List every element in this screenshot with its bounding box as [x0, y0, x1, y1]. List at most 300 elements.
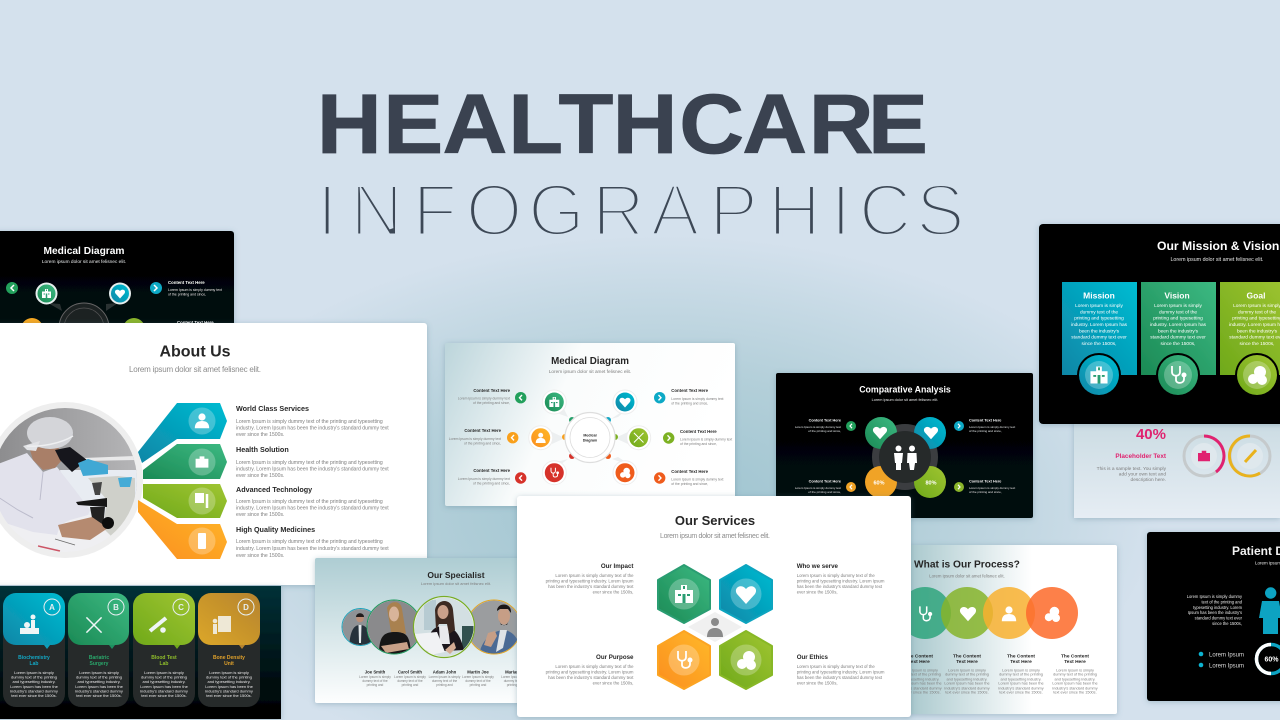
text: world class services: Lorem Ipsum is simply dummy text of the printing and typesetting [236, 419, 383, 425]
text: our purpose: Our Purpose [596, 654, 634, 661]
card: mission: printing and typesetting [1074, 316, 1124, 322]
step 1 text: and typesetting industry. [899, 677, 939, 681]
card A: Lab [30, 661, 38, 667]
centre diamond with doctor icon [688, 612, 742, 642]
step 2 text [944, 654, 990, 695]
panel: about us [0, 323, 427, 585]
card: mission: Mission [1083, 290, 1115, 300]
team names: printing and [436, 683, 453, 687]
description [1187, 594, 1243, 626]
content labels: of the printing and since, [473, 401, 510, 405]
step 2 text: Lorem Ipsum is simply [948, 668, 986, 672]
card A: industry's standard dummy [10, 688, 58, 694]
portrait 4 [471, 600, 517, 654]
subheading: Lorem ipsum dolor sit amet felisnec elit. [929, 574, 1005, 578]
text: high quality medicines: ever since the 1500s. [236, 553, 284, 559]
hexagon: heart [720, 565, 772, 623]
step 4 text: and typesetting industry. [1055, 677, 1095, 681]
step 4 text: dummy text of the printing [1053, 673, 1097, 677]
node: person [529, 426, 553, 450]
panel: comparative analysis [776, 373, 1033, 518]
subheading: Lorem ipsum dolor sit amet felisnec elit. [129, 365, 261, 374]
hub [565, 412, 615, 462]
node: surgery [627, 426, 651, 450]
card: vision: been the industry's [1158, 328, 1199, 334]
circle: yellow [983, 587, 1035, 639]
arrow: world class services [138, 403, 227, 463]
labels: Content Text Here [809, 418, 841, 422]
description: add your own text and [1119, 472, 1166, 478]
step 4 text: The Content [1061, 654, 1089, 660]
card C: C [178, 603, 184, 612]
card C: Lorem Ipsum is simply [144, 670, 184, 675]
text: our impact [546, 563, 634, 595]
donut: pink [1184, 436, 1224, 476]
legend [1199, 652, 1244, 670]
text: who we serve: Lorem Ipsum is simply dummy text of the [797, 573, 875, 578]
card B: B [113, 603, 119, 612]
card A [3, 593, 65, 707]
text: who we serve [797, 563, 885, 595]
team names: Lorem Ipsum is simply [394, 675, 426, 679]
text: our purpose: has been the industry's standard dummy text [548, 675, 634, 680]
team names: printing and [470, 683, 487, 687]
card D: text ever since the 1500s. [206, 693, 252, 698]
content labels: Lorem Ipsum is simply dummy text [680, 438, 732, 442]
card: vision: dummy text of the [1159, 309, 1197, 315]
donut: 60 percent: 60% [1264, 656, 1279, 664]
portrait 2 [366, 600, 417, 654]
text: world class services [236, 404, 389, 438]
outer ring [872, 424, 938, 490]
subheading: Lorem ipsum dolor sit amet felisnec elit. [421, 581, 491, 586]
card A: text ever since the 1500s. [11, 693, 57, 698]
content labels: Lorem Ipsum is simply dummy text [458, 477, 510, 481]
background glow [160, 235, 1160, 720]
text: advanced technology [236, 485, 389, 518]
circle: 80 percent: 80% [925, 480, 937, 486]
step 2 text: industry's standard dummy [944, 686, 990, 690]
donut: 60 percent [1256, 644, 1280, 674]
heading: Our Specialist [427, 570, 485, 580]
card: goal: since the 1500s, [1240, 341, 1274, 347]
subheading: Lorem ipsum dolor sit amet felisnec elit. [1170, 257, 1264, 263]
step 2 text: dummy text of the printing [945, 673, 989, 677]
hexagon: hospital [658, 565, 710, 623]
content labels: Lorem Ipsum is simply dummy text [449, 437, 501, 441]
card B [68, 593, 129, 707]
content labels: of the printing and since, [680, 442, 717, 446]
heading: About Us [159, 344, 231, 361]
step 1 text: Lorem Ipsum has been the [896, 682, 942, 686]
panel: placeholder donuts [1074, 400, 1280, 518]
description: since the 1500s, [1212, 621, 1242, 626]
team names: Lorem Ipsum is [501, 675, 523, 679]
labels: Content Text Here [969, 418, 1001, 422]
arrows [507, 392, 674, 484]
panel: process [896, 545, 1117, 714]
circle: 80 percent [914, 466, 946, 498]
card: vision: Vision [1164, 290, 1190, 300]
step 1 text [896, 654, 942, 695]
card: mission [1062, 282, 1137, 397]
labels: of the printing and since, [808, 490, 841, 494]
content text: Content Text Here [168, 280, 205, 285]
team names: printing [507, 683, 517, 687]
team names: printing and [402, 683, 419, 687]
card: goal: Goal [1247, 290, 1265, 300]
labels: Lorem Ipsum is simply dummy text [969, 486, 1015, 490]
text: who we serve: has been the industry's standard dummy text [797, 584, 883, 589]
arrow left [6, 282, 18, 294]
card B: Bariatric [89, 655, 109, 661]
text: our impact: Lorem Ipsum is simply dummy text of the [555, 573, 634, 578]
text: advanced technology: Advanced Technology [236, 485, 312, 494]
hub: Medical [583, 434, 597, 438]
hub dots [562, 417, 618, 459]
text: our impact: has been the industry's standard dummy text [548, 584, 634, 589]
title: healthcare: HEALTHCARE [317, 78, 928, 171]
team names: Marian [505, 670, 519, 674]
step 3 text: Lorem Ipsum has been the [998, 682, 1044, 686]
text: advanced technology: Lorem Ipsum is simply dummy text of the printing and typesetting [236, 499, 383, 505]
subtitle: infographics: INFOGRAPHICS [317, 170, 965, 251]
text: world class services: ever since the 1500s. [236, 432, 284, 438]
labels: of the printing and since, [969, 490, 1002, 494]
text: health solution: ever since the 1500s. [236, 473, 284, 479]
hexagon: pills [720, 631, 772, 689]
text: our impact: Our Impact [601, 563, 634, 570]
card C: Lorem Ipsum has been the [140, 684, 189, 689]
content text: Lorem Ipsum is simply dummy text [168, 288, 222, 292]
step 3 text: Lorem Ipsum is simply [1002, 668, 1040, 672]
content text lower: Content Text Here [177, 320, 214, 325]
content labels: Content Text Here [473, 468, 511, 473]
step 4 text: industry's standard dummy [1052, 686, 1098, 690]
content labels [449, 388, 732, 486]
card: goal: dummy text of the [1238, 309, 1276, 315]
node: hospital [36, 282, 58, 304]
content text: of the printing and since, [168, 292, 206, 296]
subheading: Lorem ipsum dolor sit amet felisnec elit. [42, 259, 126, 265]
panel: mission and vision [1039, 224, 1280, 424]
card C: dummy text of the printing [141, 675, 187, 680]
text: world class services: World Class Services [236, 404, 309, 413]
subheading: Lorem ipsum dolor sit amet felisnec elit. [872, 398, 938, 402]
portrait 1 [342, 608, 372, 646]
team names: dummy text [504, 679, 520, 683]
card: goal: Lorem Ipsum is simply [1233, 303, 1280, 309]
step 3 text: industry's standard dummy [998, 686, 1044, 690]
card A: Lorem Ipsum is simply [14, 670, 54, 675]
card: mission: Lorem Ipsum is simply [1075, 303, 1123, 309]
text: high quality medicines: Lorem Ipsum is simply dummy text of the printing and typesetting [236, 539, 383, 545]
text: our purpose [546, 654, 634, 686]
connectors [48, 303, 118, 311]
text: our purpose: ever since the 1500s, [593, 681, 634, 686]
panel: light medical diagram [445, 343, 735, 506]
node: hospital [542, 390, 566, 414]
team names: Carol Smith [398, 670, 422, 674]
text: advanced technology: ever since the 1500s. [236, 512, 284, 518]
description [1097, 466, 1167, 483]
text: who we serve: printing and typesetting industry. Lorem Ipsum [797, 579, 885, 584]
card D: Lorem Ipsum is simply [209, 670, 249, 675]
heading: Placeholder Text [1115, 453, 1167, 460]
content labels: of the printing and since, [473, 482, 510, 486]
description: Ipsum has been the industry's [1188, 610, 1242, 615]
heading: What is Our Process? [914, 560, 1020, 570]
panel: our services [517, 496, 911, 717]
labels: Lorem Ipsum is simply dummy text [795, 486, 841, 490]
labels [795, 418, 1015, 494]
step 2 text: text ever since the 1500s. [945, 691, 989, 695]
legend: Lorem Ipsum [1209, 652, 1244, 658]
panel: dark lab cards [0, 586, 281, 719]
text: our ethics: Our Ethics [797, 654, 829, 661]
card C: text ever since the 1500s. [141, 693, 187, 698]
card A: A [49, 603, 55, 612]
text: health solution: industry. Lorem Ipsum has been the industry's standard dummy text [236, 466, 389, 472]
content text [168, 280, 222, 296]
labels: Lorem Ipsum is simply dummy text [969, 425, 1015, 429]
step 1 text: industry's standard dummy [896, 686, 942, 690]
card: mission: since the 1500s, [1082, 341, 1116, 347]
step 4 text: Text Here [1064, 659, 1086, 665]
card: vision: Lorem Ipsum is simply [1154, 303, 1202, 309]
step 1 text: text ever since the 1500s. [897, 691, 941, 695]
text: high quality medicines [236, 525, 389, 559]
content labels: Lorem Ipsum is simply dummy text [458, 396, 510, 400]
heading: Medical Diagram [551, 356, 629, 367]
card D [198, 593, 260, 707]
arrow: health solution [143, 444, 227, 479]
description: description here. [1131, 477, 1166, 483]
text: high quality medicines: industry. Lorem Ipsum has been the industry's standard dummy text [236, 546, 389, 552]
circle: green [899, 587, 951, 639]
card A: Biochemistry [18, 655, 50, 661]
text: our impact: ever since the 1500s, [593, 590, 634, 595]
card A: dummy text of the printing [11, 675, 57, 680]
description: text of the printing and [1201, 599, 1243, 604]
step 4 text: text ever since the 1500s. [1053, 691, 1097, 695]
step 4 text [1052, 654, 1098, 695]
content labels: Content Text Here [473, 388, 511, 393]
node: heart [613, 390, 637, 414]
text: our ethics: ever since the 1500s, [797, 681, 838, 686]
card D: industry's standard dummy [205, 688, 253, 694]
arrow: advanced technology [143, 484, 227, 518]
circle: lime [941, 587, 993, 639]
description: standard dummy text ever [1195, 616, 1243, 621]
card B: Surgery [90, 661, 109, 667]
heading: Medical Diagram [44, 246, 124, 257]
text: our ethics: has been the industry's standard dummy text [797, 675, 883, 680]
card: mission: standard dummy text ever [1071, 335, 1127, 341]
team names: printing and [367, 683, 384, 687]
text: advanced technology: industry. Lorem Ipsum has been the industry's standard dummy text [236, 506, 389, 512]
card C: industry's standard dummy [140, 688, 188, 694]
subheading: Lorem ipsum dolor sit amet felisnec elit. [660, 533, 770, 540]
panel: patient demographics [1147, 532, 1280, 701]
team names: Adam John [433, 670, 457, 674]
arrows [846, 421, 964, 492]
team names: Martin Joe [467, 670, 489, 674]
heading: Our Mission & Vision [1157, 239, 1279, 253]
description: This is a sample text. You simply [1097, 466, 1167, 472]
step 3 text: and typesetting industry. [1001, 677, 1041, 681]
step 2 text: Text Here [956, 659, 978, 665]
subheading: Lorem ipsum dolor sit amet felisnec elit. [549, 369, 631, 374]
card: mission: been the industry's [1079, 328, 1120, 334]
labels: Content Text Here [969, 480, 1001, 484]
node: heart [109, 282, 131, 304]
text: world class services: industry. Lorem Ipsum has been the industry's standard dummy text [236, 426, 389, 432]
card A: and typesetting industry. [12, 679, 56, 684]
team names [359, 670, 523, 687]
step 1 text: The Content [905, 654, 933, 660]
panel: dark medical diagram [0, 231, 234, 353]
step 3 text [998, 654, 1044, 695]
labels: Lorem Ipsum is simply dummy text [795, 425, 841, 429]
heading: Our Services [675, 513, 755, 528]
text: health solution [236, 445, 389, 479]
legend: Lorem Ipsum [1209, 664, 1244, 670]
circle: orange [1026, 587, 1078, 639]
content labels: of the printing and since, [464, 442, 501, 446]
circle: heart blue [914, 417, 946, 449]
card D: and typesetting industry. [207, 679, 251, 684]
text: our purpose: Lorem Ipsum is simply dummy text of the [555, 664, 634, 669]
card B: text ever since the 1500s. [76, 693, 122, 698]
text: our ethics: Lorem Ipsum is simply dummy text of the [797, 664, 875, 669]
content labels: Lorem Ipsum is simply dummy text [671, 478, 724, 482]
donut: yellow [1229, 436, 1270, 476]
step 3 text: dummy text of the printing [999, 673, 1043, 677]
card C [133, 593, 195, 707]
step 2 text: The Content [953, 654, 981, 660]
team names: dummy text of the [397, 679, 423, 683]
card: vision: printing and typesetting [1153, 316, 1203, 322]
step 1 text: Lorem Ipsum is simply [900, 668, 938, 672]
text: our ethics: printing and typesetting industry. Lorem Ipsum [797, 670, 885, 675]
content labels: Content Text Here [680, 429, 717, 434]
step 3 text: Text Here [1010, 659, 1032, 665]
step 1 text: dummy text of the printing [897, 673, 941, 677]
team names: Joe Smith [365, 670, 386, 674]
card B: Lorem Ipsum is simply [79, 670, 119, 675]
labels: of the printing and since, [969, 429, 1002, 433]
card: goal [1220, 282, 1280, 397]
text: high quality medicines: High Quality Medicines [236, 525, 315, 534]
card D: Lorem Ipsum has been the [205, 684, 254, 689]
text: who we serve: ever since the 1500s, [797, 590, 838, 595]
content labels: of the printing and since, [671, 482, 708, 486]
card: mission: dummy text of the [1080, 309, 1118, 315]
icon: person figure [1259, 587, 1280, 634]
photo: scientist at microscope [0, 402, 143, 560]
step 2 text: and typesetting industry. [947, 677, 987, 681]
description: typesetting industry. Lorem [1193, 605, 1243, 610]
card D: Bone Density [213, 655, 245, 661]
panel: specialist [315, 558, 530, 703]
card C: and typesetting industry. [142, 679, 186, 684]
card D: dummy text of the printing [206, 675, 252, 680]
card B: dummy text of the printing [76, 675, 122, 680]
team names: Lorem Ipsum is simply [462, 675, 494, 679]
card D: Unit [224, 661, 234, 667]
card: vision: industry. Lorem Ipsum has [1150, 322, 1207, 328]
centre [879, 431, 931, 483]
card: mission: industry. Lorem Ipsum has [1071, 322, 1128, 328]
text: health solution: Health Solution [236, 445, 289, 454]
connectors [548, 405, 632, 466]
team names: Lorem Ipsum is simply [359, 675, 391, 679]
arrow right [150, 282, 162, 294]
card A: Lorem Ipsum has been the [10, 684, 59, 689]
card: goal: been the industry's [1237, 328, 1278, 334]
card: vision: standard dummy text ever [1150, 335, 1206, 341]
team names: dummy text of the [432, 679, 457, 683]
step 1 text: Text Here [908, 659, 930, 665]
hexagon: stethoscope [658, 631, 710, 689]
partial nodes [21, 318, 145, 340]
team names: dummy text of the [465, 679, 491, 683]
card: vision [1141, 282, 1216, 397]
team names: dummy text of the [362, 679, 388, 683]
step 4 text: Lorem Ipsum has been the [1052, 682, 1098, 686]
icon: two people [894, 446, 917, 470]
portrait 3 [413, 596, 475, 658]
content labels: Lorem Ipsum is simply dummy text [671, 397, 724, 401]
content labels: Content Text Here [671, 469, 709, 474]
step 2 text: Lorem Ipsum has been the [944, 682, 990, 686]
description: Lorem Ipsum is simply dummy [1187, 594, 1243, 599]
text: health solution: Lorem Ipsum is simply dummy text of the printing and typesetting [236, 460, 383, 466]
card: vision: since the 1500s, [1161, 341, 1195, 347]
step 3 text: The Content [1007, 654, 1035, 660]
card D: D [243, 603, 249, 612]
node: pills [613, 461, 637, 485]
step 4 text: Lorem Ipsum is simply [1056, 668, 1094, 672]
text: our ethics [797, 654, 885, 686]
circle: heart green [865, 417, 897, 449]
labels: Content Text Here [809, 480, 841, 484]
text: our purpose: printing and typesetting industry. Lorem Ipsum [546, 670, 634, 675]
content labels: Content Text Here [464, 428, 502, 433]
card B: industry's standard dummy [75, 688, 123, 694]
card B: Lorem Ipsum has been the [75, 684, 124, 689]
step 3 text: text ever since the 1500s. [999, 691, 1043, 695]
text: our impact: printing and typesetting industry. Lorem Ipsum [546, 579, 634, 584]
stat: 40 percent: 40% [1136, 426, 1166, 443]
labels: of the printing and since, [808, 429, 841, 433]
hub: Diagram [583, 438, 597, 442]
team names: Lorem Ipsum is simply [429, 675, 461, 679]
text: who we serve: Who we serve [797, 563, 839, 570]
circle: 60 percent [865, 466, 897, 498]
hub ring [59, 303, 109, 353]
circle: 60 percent: 60% [873, 480, 885, 486]
content labels: Content Text Here [671, 388, 709, 393]
arrow: high quality medicines [138, 500, 227, 559]
card B: and typesetting industry. [77, 679, 121, 684]
content labels: of the printing and since, [671, 402, 708, 406]
heading: Comparative Analysis [859, 384, 951, 394]
card C: Blood Test [151, 655, 177, 661]
node: stethoscope [542, 461, 566, 485]
card C: Lab [160, 661, 168, 667]
